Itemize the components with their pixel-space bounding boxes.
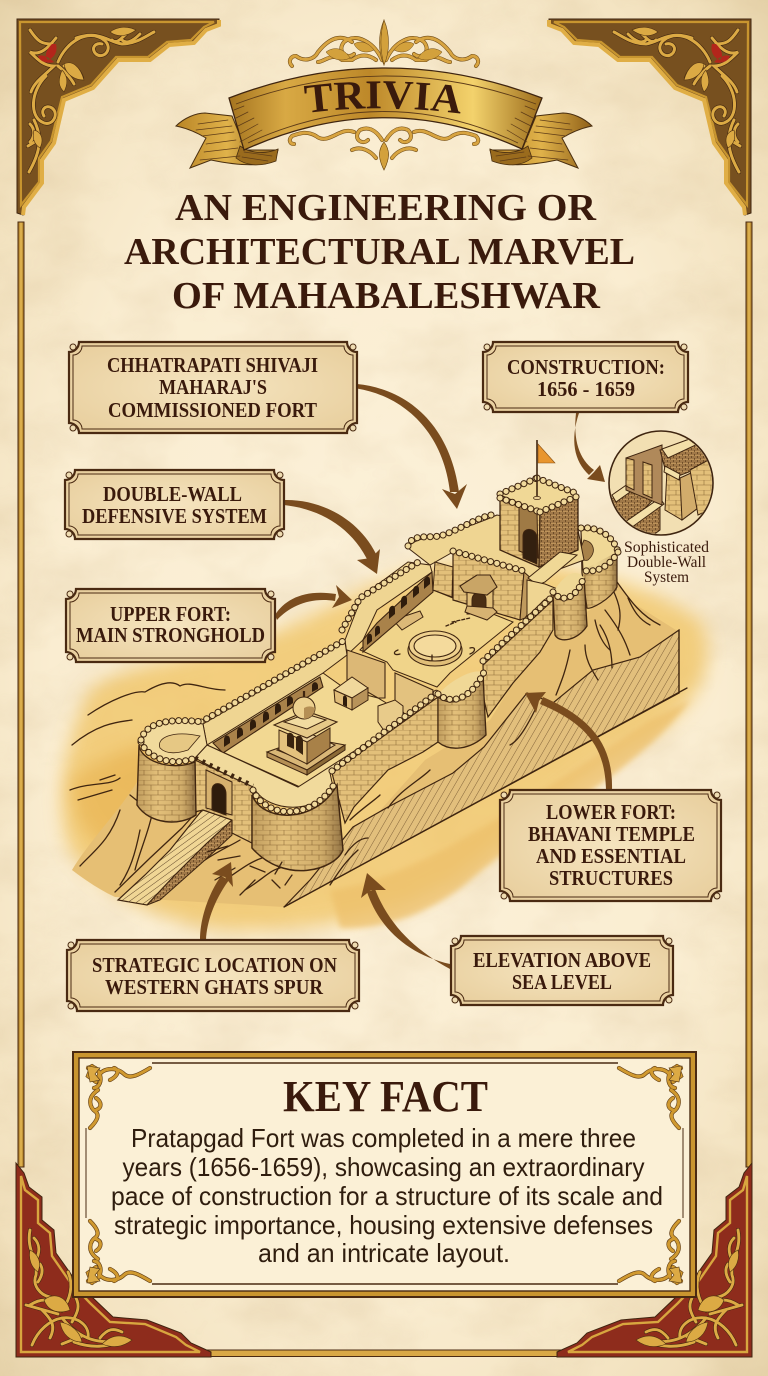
main title: AN ENGINEERING OR: [175, 187, 597, 229]
callout: upper fort: UPPER FORT:: [110, 602, 231, 626]
ribbon left tail: [176, 113, 278, 168]
top-right ornamental corner: [549, 19, 751, 215]
inset caption: Double-Wall: [627, 554, 706, 571]
callout: construction dates: 1656 - 1659: [537, 377, 635, 401]
panel: key fact: [73, 1052, 696, 1297]
arrow: lower fort to temple area: [525, 692, 612, 790]
callout: strategic location: [67, 940, 359, 1011]
top-left ornamental corner: [17, 19, 219, 215]
lower courtyard: [207, 673, 410, 787]
inset caption: [624, 539, 709, 586]
key fact body text: pace of construction for a structure of its scale and: [111, 1181, 663, 1211]
keep tower: [500, 478, 578, 567]
main title: OF MAHABALESHWAR: [172, 275, 601, 317]
callout: elevation above sea level: [451, 936, 673, 1005]
right inner terrace: [527, 580, 560, 617]
front-left round tower: [137, 721, 207, 822]
callout: double-wall defensive system: [65, 470, 284, 539]
callout: upper fort: [66, 589, 275, 662]
arrow: commissioned fort to keep wall: [357, 384, 467, 509]
illustration: Pratapgad fort: [70, 440, 687, 907]
callout: lower fort: BHAVANI TEMPLE: [528, 822, 695, 846]
back lower rampart: [201, 640, 347, 745]
front-right round tower: [252, 783, 343, 871]
second partition: [395, 673, 433, 722]
upper arcade gallery: [363, 572, 433, 652]
banner: trivia ribbon: [175, 19, 593, 170]
hill ground: [72, 582, 679, 907]
key fact body text: and an intricate layout.: [258, 1238, 510, 1268]
callout: strategic location: STRATEGIC LOCATION ON: [92, 953, 337, 977]
watercolor wash behind fort: [62, 560, 708, 930]
key fact corner ornaments: [87, 1066, 682, 1283]
upper fort rear terrace: [408, 515, 584, 580]
page frame side bars: [18, 222, 752, 1356]
rear right bastion: [580, 528, 618, 608]
callout: double-wall defensive system: DOUBLE-WALL: [103, 482, 242, 506]
stairway up to the gate: [115, 808, 232, 905]
small house: [334, 677, 368, 710]
rear bastion battlement: [408, 514, 497, 546]
front lower terrace: [195, 720, 412, 807]
back upper rampart with crenellations: [342, 561, 432, 655]
arrow: strategic location: [200, 862, 233, 940]
callout: construction dates: CONSTRUCTION:: [507, 355, 665, 379]
right upper curtain wall: [483, 596, 553, 717]
callout: lower fort: LOWER FORT:: [546, 800, 676, 824]
callout: commissioned fort: CHHATRAPATI SHIVAJI: [107, 353, 318, 377]
lower arcade gallery: [213, 677, 323, 753]
main title: [124, 187, 635, 317]
key fact body text: Pratapgad Fort was completed in a mere three: [131, 1123, 636, 1153]
callout: commissioned fort: COMMISSIONED FORT: [108, 398, 318, 422]
palace wall: [433, 551, 544, 620]
bottom-right red ornamental corner: [557, 1163, 752, 1357]
front gatehouse: [195, 758, 253, 843]
saffron flag on pole: [534, 440, 555, 500]
callout: construction dates: [483, 342, 688, 412]
middle tower: [438, 671, 486, 748]
banner title text: TRIVIA: [304, 81, 460, 114]
callout: double-wall defensive system: DEFENSIVE SYSTEM: [82, 504, 267, 528]
distant hills: [70, 683, 225, 790]
walkway to keep: [528, 552, 577, 585]
inset caption: System: [644, 569, 689, 586]
arrow: elevation above sea level: [361, 873, 450, 969]
arrow: upper fort to gallery: [275, 585, 352, 620]
callout: commissioned fort: MAHARAJ'S: [159, 375, 267, 399]
hillside strokes under the fort: [207, 846, 282, 874]
callout: lower fort: AND ESSENTIAL: [536, 844, 686, 868]
arrow: construction to wall detail: [574, 413, 605, 482]
key fact body text: strategic importance, housing extensive defenses: [114, 1210, 653, 1240]
courtyard marks: [395, 604, 470, 687]
key fact heading: KEY FACT: [283, 1072, 488, 1121]
ribbon right tail: [490, 113, 592, 168]
callout: lower fort: STRUCTURES: [549, 866, 673, 890]
key fact body text: years (1656-1659), showcasing an extraordinary: [122, 1152, 644, 1182]
ribbon central band: [229, 68, 542, 150]
callout: commissioned fort: [69, 342, 357, 433]
callout: strategic location: WESTERN GHATS SPUR: [105, 975, 323, 999]
arrow: double wall to rampart: [284, 500, 380, 574]
callout: elevation above sea level: SEA LEVEL: [512, 970, 612, 994]
inset caption: Sophisticated: [624, 539, 709, 556]
callout: elevation above sea level: ELEVATION ABOVE: [473, 948, 651, 972]
ribbon top ornament: [290, 20, 478, 170]
lower curtain wall: [332, 692, 438, 823]
bottom-left red ornamental corner: [16, 1163, 211, 1357]
inset: double-wall detail circle: [608, 430, 714, 536]
small block building: [378, 700, 403, 732]
rear right lower tower: [553, 573, 587, 640]
upper courtyard: [360, 590, 513, 687]
key fact body text: [111, 1123, 663, 1268]
main title: ARCHITECTURAL MARVEL: [124, 231, 635, 273]
well: [394, 631, 474, 666]
temple: [267, 691, 345, 775]
callout: upper fort: MAIN STRONGHOLD: [76, 623, 265, 647]
callout: lower fort: [500, 790, 721, 901]
partition wall: [347, 650, 385, 698]
gate pavilion: [460, 575, 497, 620]
rock strokes: [78, 582, 660, 895]
hatched rock cliff face: [284, 630, 679, 907]
